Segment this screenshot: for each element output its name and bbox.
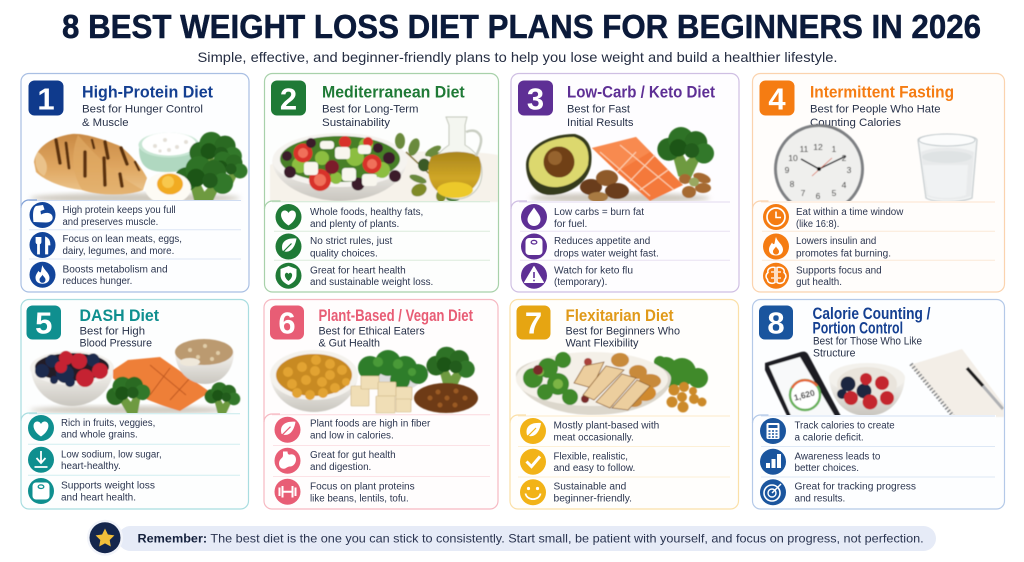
best for: Best for Those Who Like xyxy=(813,335,922,347)
best for: Sustainability xyxy=(322,117,390,129)
bullet: dumbbell: like beans, lentils, tofu. xyxy=(310,493,409,504)
bullet: clock: (like 16:8). xyxy=(796,219,839,230)
heading: Low-Carb / Keto Diet xyxy=(567,83,715,101)
best for: Best for People Who Hate xyxy=(810,103,940,115)
bullet: heart xyxy=(276,204,423,230)
badge 6: 6 xyxy=(278,306,296,340)
bullet: scale: Reduces appetite and xyxy=(554,236,650,247)
bullet: stomach: and digestion. xyxy=(310,462,371,473)
best for: Structure xyxy=(813,348,856,360)
best for: Best for Fast xyxy=(567,103,631,115)
badge 5: 5 xyxy=(35,306,52,340)
bullet: smile: beginner-friendly. xyxy=(554,494,632,505)
badge 8: 8 xyxy=(767,306,785,340)
best for xyxy=(813,335,922,360)
bullet panel xyxy=(510,415,730,509)
panel: 5 DASH Diet xyxy=(21,300,248,509)
bullet: scale xyxy=(28,478,155,504)
water glass xyxy=(918,134,977,202)
clock: 9 xyxy=(785,165,790,175)
food: phone, fruit bowl, notebook, pen: 1,620 xyxy=(793,387,816,403)
best for: Counting Calories xyxy=(810,117,901,129)
heading: Flexitarian Diet xyxy=(566,307,674,325)
best for xyxy=(810,103,940,129)
food: chickpeas, greens, tofu, lentils xyxy=(270,347,478,413)
bullet: heart: Rich in fruits, veggies, xyxy=(61,418,155,429)
clock: 2 xyxy=(842,153,847,163)
clock: 10 xyxy=(788,153,798,163)
bullet: dumbbell: Focus on plant proteins xyxy=(310,482,415,493)
bullet: muscle: and preserves muscle. xyxy=(62,217,158,228)
bullet: target xyxy=(760,479,916,505)
clock: 1 xyxy=(832,144,837,154)
heading: Mediterranean Diet xyxy=(322,83,465,101)
bullet: scale: Supports weight loss xyxy=(61,480,155,491)
bullet: shield: Great for heart health xyxy=(310,265,406,276)
best for xyxy=(567,103,634,129)
heading: High-Protein Diet xyxy=(82,83,213,101)
bullet: warning: (temporary). xyxy=(554,277,607,288)
heading: DASH Diet xyxy=(80,307,159,325)
clock: 4 xyxy=(842,180,847,190)
bullet panel xyxy=(752,415,996,509)
badge 4 xyxy=(760,80,794,116)
best for xyxy=(566,325,680,350)
bullet: cutlery: dairy, legumes, and more. xyxy=(62,246,174,257)
heading: Intermittent Fasting xyxy=(810,83,954,101)
bullet: flame: reduces hunger. xyxy=(62,276,132,287)
bullet: bars: better choices. xyxy=(794,463,859,474)
bullet: leaf xyxy=(274,417,431,443)
bullet: scale xyxy=(521,234,659,260)
bullet panel xyxy=(511,201,731,292)
bullet panel xyxy=(264,414,490,509)
food: chicken, cottage cheese, egg, broccoli xyxy=(30,132,248,210)
clock xyxy=(774,124,864,214)
food: salad bowl, olive branch, oil jug xyxy=(270,117,498,202)
bullet: check: Flexible, realistic, xyxy=(554,451,628,462)
bullet: leaf xyxy=(276,234,393,260)
badge 7 xyxy=(516,306,550,340)
bullet: calculator: a calorie deficit. xyxy=(794,432,864,444)
bullet: brain xyxy=(763,263,882,289)
bullet panel xyxy=(264,201,490,292)
best for: Blood Pressure xyxy=(80,338,152,350)
best for xyxy=(80,325,152,350)
bullet: muscle: High protein keeps you full xyxy=(62,205,176,216)
badge 1 xyxy=(28,80,64,116)
clock: 3 xyxy=(847,165,852,175)
bullet: muscle xyxy=(30,202,176,228)
bullet: check xyxy=(520,449,635,475)
panel: 2 Mediterranean Diet xyxy=(264,74,498,292)
bullet: drop xyxy=(521,204,644,230)
best for xyxy=(82,103,203,129)
panel: 8 Calorie Counting / Portion Control xyxy=(752,300,1004,509)
bullet: down arrow: Low sodium, low sugar, xyxy=(61,449,162,460)
clock: 7 xyxy=(801,188,806,198)
badge 5 xyxy=(26,306,61,340)
subtitle: Simple, effective, and beginner-friendly plans to help you lose weight and build a healthier lifestyle. xyxy=(198,50,838,65)
bullet: heart: and plenty of plants. xyxy=(310,219,399,230)
bullet: scale: drops water weight fast. xyxy=(554,248,659,260)
bullet: smile xyxy=(520,479,632,505)
bullet: flame xyxy=(30,262,168,288)
remember text: Remember: The best diet is the one you can stick to consistently. Start small, be patient with yourself, and focus on progress, not perfection. xyxy=(138,532,924,546)
bullet: calculator: Track calories to create xyxy=(794,421,895,432)
best for: Want Flexibility xyxy=(566,338,639,350)
badge 3: 3 xyxy=(527,82,544,116)
food: berries, salmon, grains, broccoli xyxy=(30,339,240,421)
badge 7: 7 xyxy=(525,306,542,340)
best for: & Muscle xyxy=(82,117,128,129)
bullet: dumbbell xyxy=(274,479,415,505)
clock: 8 xyxy=(790,179,795,189)
food: phone, fruit bowl, notebook, pen xyxy=(765,349,1004,418)
bullet: leaf: and low in calories. xyxy=(310,431,394,442)
bullet: shield: and sustainable weight loss. xyxy=(310,277,433,288)
bullet: leaf: Mostly plant-based with xyxy=(554,421,659,432)
clock: 11 xyxy=(800,144,809,154)
bullet: leaf: quality choices. xyxy=(310,248,378,260)
bullet: flame: Lowers insulin and xyxy=(796,236,876,247)
best for: Best for Beginners Who xyxy=(566,325,680,337)
clock: 5 xyxy=(832,188,837,198)
heading: Calorie Counting / xyxy=(812,305,931,323)
bullet: heart: and whole grains. xyxy=(61,430,138,441)
bullet: leaf: Plant foods are high in fiber xyxy=(310,419,431,430)
bullet: shield xyxy=(276,263,433,289)
panel: 4 Intermittent Fasting xyxy=(752,74,1004,292)
bullet: cutlery: Focus on lean meats, eggs, xyxy=(62,234,182,245)
bullet: down arrow xyxy=(28,447,162,473)
best for: Best for Ethical Eaters xyxy=(318,325,425,337)
bullet: calculator xyxy=(760,418,895,444)
bullet: warning: Watch for keto flu xyxy=(554,265,633,276)
best for: Best for Long-Term xyxy=(322,103,418,115)
callout: remember xyxy=(87,520,936,556)
panel: 7 Flexitarian Diet xyxy=(510,300,738,509)
bullet: heart xyxy=(28,415,155,441)
heading: Portion Control xyxy=(812,319,903,337)
bullet: flame: promotes fat burning. xyxy=(796,248,891,260)
bullet: down arrow: heart-healthy. xyxy=(61,461,121,472)
bullet: drop: Low carbs = burn fat xyxy=(554,207,644,218)
bullet: leaf: No strict rules, just xyxy=(310,236,393,247)
bullet: flame: Boosts metabolism and xyxy=(62,264,168,276)
best for: Best for High xyxy=(80,325,145,337)
title: 8 BEST WEIGHT LOSS DIET PLANS FOR BEGINNERS IN 2026 xyxy=(62,8,981,45)
badge 2: 2 xyxy=(280,82,297,116)
best for xyxy=(318,325,425,350)
bullet: leaf xyxy=(520,418,659,444)
badge 3 xyxy=(518,80,553,116)
panel: 1 High-Protein Diet xyxy=(21,74,249,292)
best for: Best for Hunger Control xyxy=(82,103,203,115)
bullet panel xyxy=(21,200,241,292)
bullet: stomach: Great for gut health xyxy=(310,450,396,461)
heading: Plant-Based / Vegan Diet xyxy=(318,307,473,325)
bullet: heart: Whole foods, healthy fats, xyxy=(310,207,423,218)
bullet: stomach xyxy=(274,448,396,474)
badge 4: 4 xyxy=(768,82,786,116)
food: plate with chicken, greens, chickpeas xyxy=(516,352,708,415)
bullet: target: Great for tracking progress xyxy=(794,482,916,493)
bullet: scale: and heart health. xyxy=(61,493,136,504)
bullet: drop: for fuel. xyxy=(554,219,587,230)
badge 6 xyxy=(270,306,304,340)
badge 2 xyxy=(271,80,306,116)
bullet: bars xyxy=(760,449,881,475)
bullet: leaf: meat occasionally. xyxy=(554,432,634,444)
bullet: smile: Sustainable and xyxy=(554,482,626,493)
panel: 6 Plant-Based / Vegan Diet xyxy=(264,300,498,509)
clock: 12 xyxy=(813,142,823,152)
badge 8 xyxy=(759,306,793,340)
clock: 6 xyxy=(816,191,821,201)
bullet: clock: Eat within a time window xyxy=(796,207,904,218)
panel: 3 Low-Carb / Keto Diet xyxy=(511,74,739,292)
best for xyxy=(322,103,418,129)
bullet: target: and results. xyxy=(794,494,845,505)
bullet: brain: Supports focus and xyxy=(796,265,882,276)
food: avocado, salmon, broccoli, nuts xyxy=(526,127,714,203)
best for: & Gut Health xyxy=(318,338,380,350)
bullet: clock xyxy=(763,204,904,230)
heading xyxy=(812,305,931,337)
bullet: warning xyxy=(521,263,633,289)
bullet panel xyxy=(752,201,996,292)
bullet: flame xyxy=(763,234,891,260)
bullet: cutlery xyxy=(30,232,182,258)
bullet: check: and easy to follow. xyxy=(554,463,635,474)
bullet: bars: Awareness leads to xyxy=(794,451,881,462)
best for: Initial Results xyxy=(567,117,634,129)
icon: star xyxy=(87,520,123,556)
badge 1: 1 xyxy=(37,82,55,116)
bullet: brain: gut health. xyxy=(796,277,842,288)
bullet panel xyxy=(21,413,240,509)
